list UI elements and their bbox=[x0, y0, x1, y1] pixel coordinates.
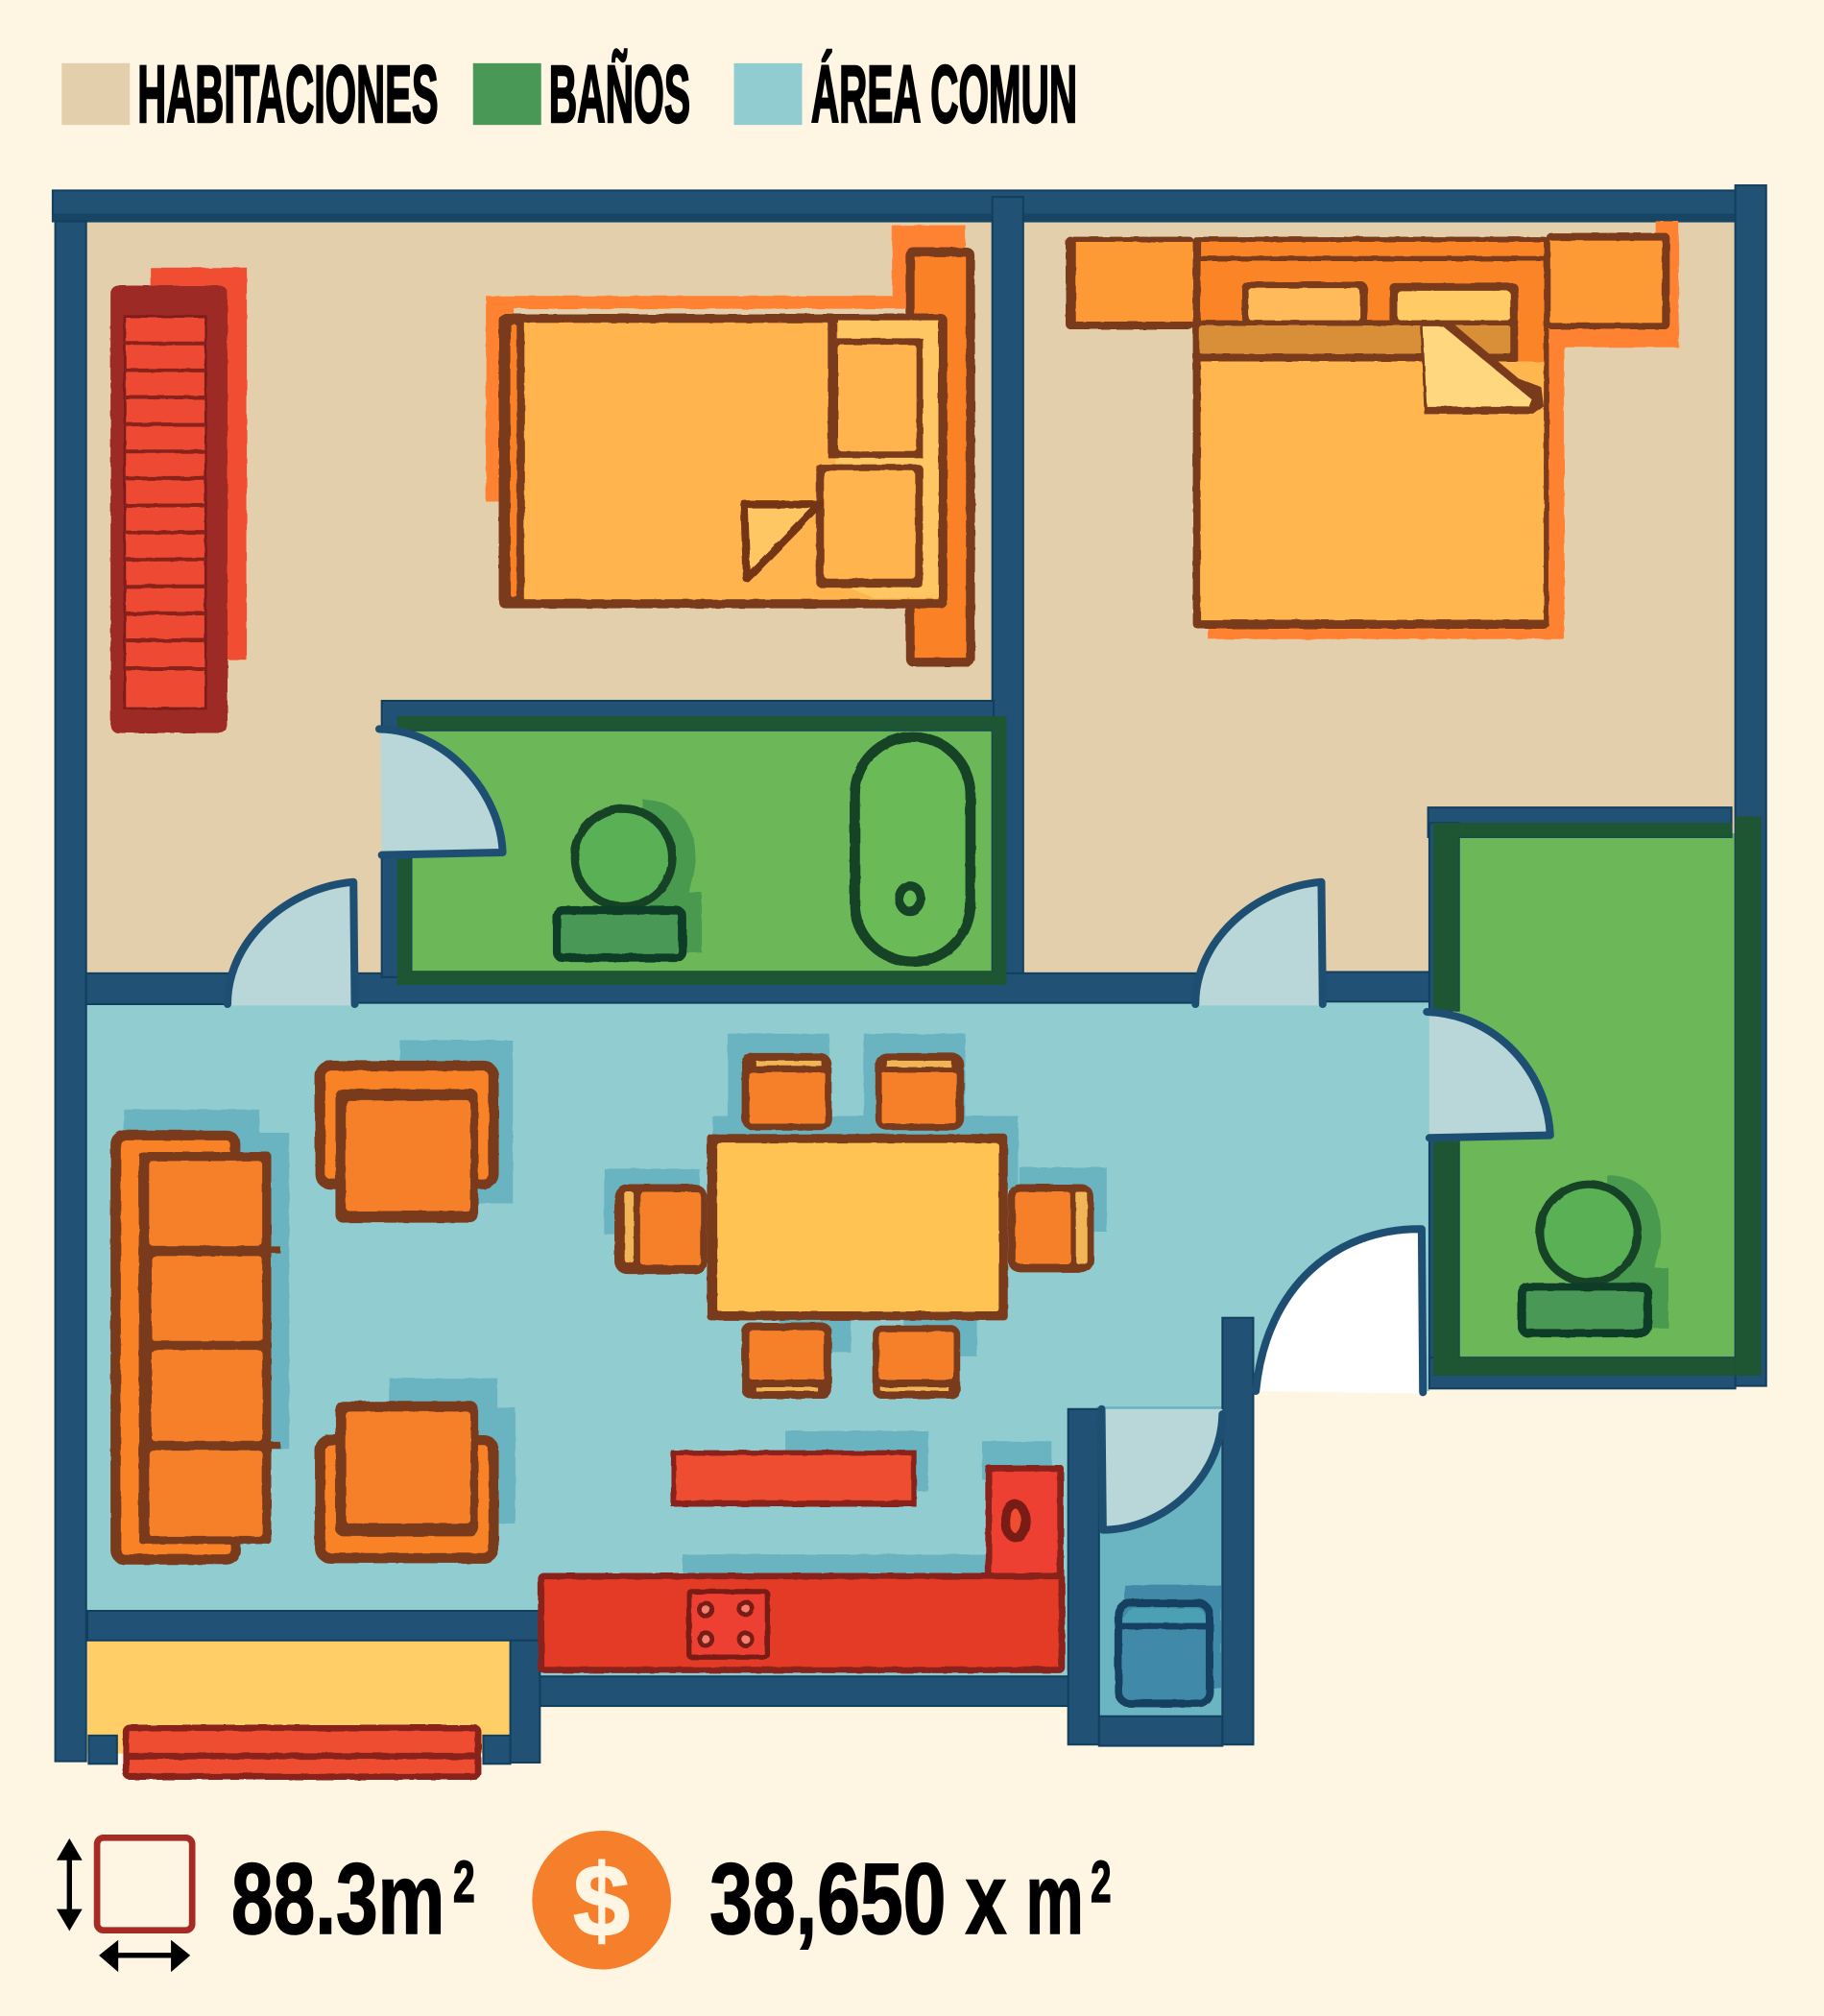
washer shadow bbox=[1125, 1585, 1221, 1688]
door: bathroom 1 bbox=[379, 729, 504, 855]
bathroom 1 fixtures bbox=[557, 736, 971, 962]
wall: balcony stub right bbox=[483, 1736, 511, 1764]
toilet bowl bbox=[575, 808, 672, 906]
toilet shadow bbox=[642, 800, 702, 952]
wall: closet right bbox=[1222, 1318, 1253, 1744]
wall: corridor right bbox=[1324, 972, 1430, 1001]
armchair seat bbox=[346, 1100, 470, 1212]
armchair seat frame bbox=[335, 1402, 478, 1536]
wall: bedroom divider bbox=[993, 197, 1023, 974]
nightstand right bbox=[1547, 233, 1669, 329]
sofa shadow bbox=[124, 1110, 289, 1449]
armchair back bbox=[320, 1440, 493, 1558]
wall: bathroom 2 left upper bbox=[1429, 823, 1459, 1011]
wall: kitchen bottom bbox=[540, 1676, 1069, 1706]
price unit m: m bbox=[1025, 1843, 1084, 1956]
chair left bbox=[614, 1184, 707, 1274]
floor: right bedroom bbox=[1020, 219, 1738, 977]
bed shadow bbox=[1209, 222, 1679, 639]
wall: balcony top bbox=[87, 1611, 540, 1641]
chair bottom right bbox=[873, 1326, 960, 1399]
armchair back bbox=[320, 1066, 493, 1184]
doors bbox=[228, 729, 1551, 1530]
bench: balcony bbox=[126, 1728, 478, 1777]
legend: HABITACIONES bbox=[137, 49, 439, 139]
wardrobe bbox=[110, 268, 247, 732]
door: closet bbox=[1101, 1409, 1222, 1530]
chair bottom left bbox=[742, 1323, 831, 1399]
floor: bathroom 2 bbox=[1455, 833, 1738, 1363]
wall: top bbox=[53, 190, 1759, 222]
console bbox=[671, 1451, 917, 1507]
shading: bathroom 2 right bbox=[1736, 816, 1761, 1376]
sheet flap bbox=[744, 504, 820, 579]
toilet tank bbox=[557, 910, 683, 958]
legend: BAÑOS bbox=[549, 48, 690, 139]
wall: right bbox=[1736, 185, 1766, 1386]
price unit x: x bbox=[966, 1843, 1006, 1956]
legend swatch: habitaciones bbox=[61, 63, 130, 125]
armchair: bottom bbox=[320, 1379, 516, 1558]
text: ÁREA COMUN bbox=[811, 49, 1077, 139]
floor: common area bbox=[84, 1000, 1429, 1676]
legend swatch: área común bbox=[734, 63, 803, 125]
bed shadow bbox=[486, 226, 966, 501]
wall: balcony right bbox=[511, 1641, 540, 1763]
armchair shadow bbox=[399, 1040, 513, 1204]
shading: bathroom 1 right bbox=[993, 731, 1006, 971]
wall: closet left bbox=[1068, 1409, 1099, 1744]
mattress bbox=[1201, 361, 1544, 620]
footboard strip bbox=[511, 324, 516, 597]
floor: closet bbox=[1096, 1406, 1225, 1720]
price value: 38,650 bbox=[709, 1843, 946, 1956]
nightstands bbox=[910, 252, 971, 662]
counter shadow bbox=[683, 1554, 991, 1580]
pillow 2 bbox=[816, 465, 923, 588]
tub drain bbox=[900, 886, 921, 912]
bed frame bbox=[1193, 237, 1548, 629]
area value: 88.3m bbox=[231, 1843, 444, 1956]
nightstand left bbox=[1066, 237, 1194, 329]
armchair: top bbox=[320, 1040, 513, 1223]
floor: left bedroom bbox=[84, 219, 995, 977]
floor plan bbox=[53, 185, 1766, 1777]
headboard area bbox=[838, 321, 938, 598]
bathroom 2 fixtures bbox=[1522, 1175, 1668, 1333]
fridge shadow bbox=[982, 1441, 1051, 1479]
armchair shadow bbox=[390, 1379, 516, 1524]
wardrobe hangers bbox=[125, 317, 205, 708]
pillow gap bbox=[835, 458, 921, 465]
door: entrance bbox=[1256, 1228, 1423, 1394]
wall: bathroom 2 left lower bbox=[1429, 1140, 1459, 1360]
sink bbox=[1005, 1504, 1025, 1538]
icon: area square bbox=[97, 1837, 192, 1931]
toilet bowl bbox=[1540, 1184, 1638, 1282]
cushion block bbox=[139, 1152, 272, 1544]
arm ticks bbox=[263, 1250, 280, 1445]
armchair seat bbox=[346, 1411, 470, 1524]
wardrobe shadow bbox=[151, 268, 247, 660]
headboard panel bbox=[1201, 261, 1544, 391]
dining table bbox=[707, 1134, 1008, 1320]
mattress bbox=[524, 323, 938, 599]
price stat bbox=[532, 1831, 1112, 1970]
toilet shadow bbox=[1607, 1175, 1668, 1328]
wall: bathroom 1 top bbox=[382, 701, 994, 731]
sofa bbox=[116, 1110, 289, 1559]
legend swatch: baños bbox=[473, 63, 541, 125]
icon: dollar coin bbox=[532, 1831, 671, 1970]
bathroom wall shading bbox=[397, 716, 1761, 1376]
armchair seat frame bbox=[335, 1089, 478, 1223]
chair top left bbox=[742, 1053, 831, 1130]
pillow 1 bbox=[1241, 281, 1368, 324]
bathtub bbox=[854, 736, 971, 962]
icon: dollar coin: $ bbox=[573, 1843, 630, 1958]
hanger lines bbox=[125, 344, 205, 669]
icon: horizontal arrow bbox=[99, 1940, 190, 1972]
washer lid line bbox=[1118, 1624, 1210, 1629]
walls bbox=[53, 185, 1766, 1764]
door: right bedroom bbox=[1195, 882, 1324, 1005]
legend bbox=[61, 48, 1077, 139]
toilet tank bbox=[1522, 1287, 1648, 1333]
cushion 4 bbox=[149, 1451, 262, 1536]
wall: corridor middle bbox=[357, 973, 1197, 1003]
kitchen bbox=[541, 1431, 1062, 1670]
shading: bathroom 2 left lower bbox=[1433, 1140, 1459, 1357]
wall: top edge shade bbox=[53, 214, 1759, 222]
area superscript: 2 bbox=[453, 1849, 475, 1915]
cushion 2 bbox=[152, 1256, 262, 1341]
shading: bathroom 2 top bbox=[1433, 823, 1732, 837]
pillow 1 bbox=[828, 322, 923, 458]
shading: bathroom 2 bottom bbox=[1433, 1357, 1736, 1376]
burners bbox=[699, 1602, 752, 1645]
washer lid bbox=[1122, 1608, 1206, 1622]
flap outline bbox=[1421, 324, 1544, 414]
washing machine bbox=[1118, 1585, 1221, 1703]
washer body bbox=[1118, 1603, 1210, 1703]
price superscript: 2 bbox=[1091, 1849, 1112, 1915]
shading: bathroom 1 left bbox=[397, 859, 411, 971]
shading: bathroom 1 top bbox=[397, 716, 1006, 731]
sheet flap bbox=[1423, 326, 1532, 406]
shading: bathroom 2 left upper bbox=[1433, 837, 1459, 1011]
icon: vertical arrow bbox=[57, 1838, 83, 1931]
wall: bathroom 2 top bbox=[1428, 807, 1732, 837]
chair shadows bbox=[604, 1034, 1107, 1356]
chair right bbox=[1008, 1184, 1093, 1273]
pillow 2 bbox=[1389, 283, 1518, 324]
counter bbox=[541, 1576, 1062, 1670]
shading: bathroom 1 bottom bbox=[397, 971, 1006, 985]
fridge bbox=[989, 1468, 1061, 1579]
wall: left bbox=[56, 222, 86, 1762]
bed frame bbox=[499, 314, 948, 609]
sheet band bbox=[1199, 325, 1510, 353]
console shadow bbox=[785, 1431, 928, 1491]
sofa frame bbox=[116, 1136, 235, 1559]
door: bathroom 2 bbox=[1427, 1012, 1551, 1138]
bed: left bedroom bbox=[486, 226, 971, 662]
headboard strip bbox=[1201, 242, 1544, 256]
wall: balcony stub left bbox=[88, 1736, 117, 1764]
area stat bbox=[57, 1837, 475, 1972]
door: left bedroom bbox=[228, 882, 356, 1005]
wall: bathroom 1 left bbox=[382, 855, 411, 977]
floor: bathroom 1 bbox=[409, 728, 1000, 977]
cooktop bbox=[689, 1592, 767, 1657]
wall: closet bottom bbox=[1099, 1716, 1222, 1746]
wall: corridor left bbox=[86, 973, 230, 1004]
bed: right bedroom bbox=[1066, 222, 1679, 639]
chair top right bbox=[876, 1053, 964, 1130]
floor: balcony bbox=[87, 1638, 515, 1754]
cushion 1 bbox=[149, 1161, 262, 1246]
dining set bbox=[604, 1034, 1107, 1399]
wall: bathroom 2 bottom bbox=[1429, 1357, 1736, 1388]
wardrobe body bbox=[110, 285, 228, 732]
cushion 3 bbox=[152, 1350, 262, 1441]
